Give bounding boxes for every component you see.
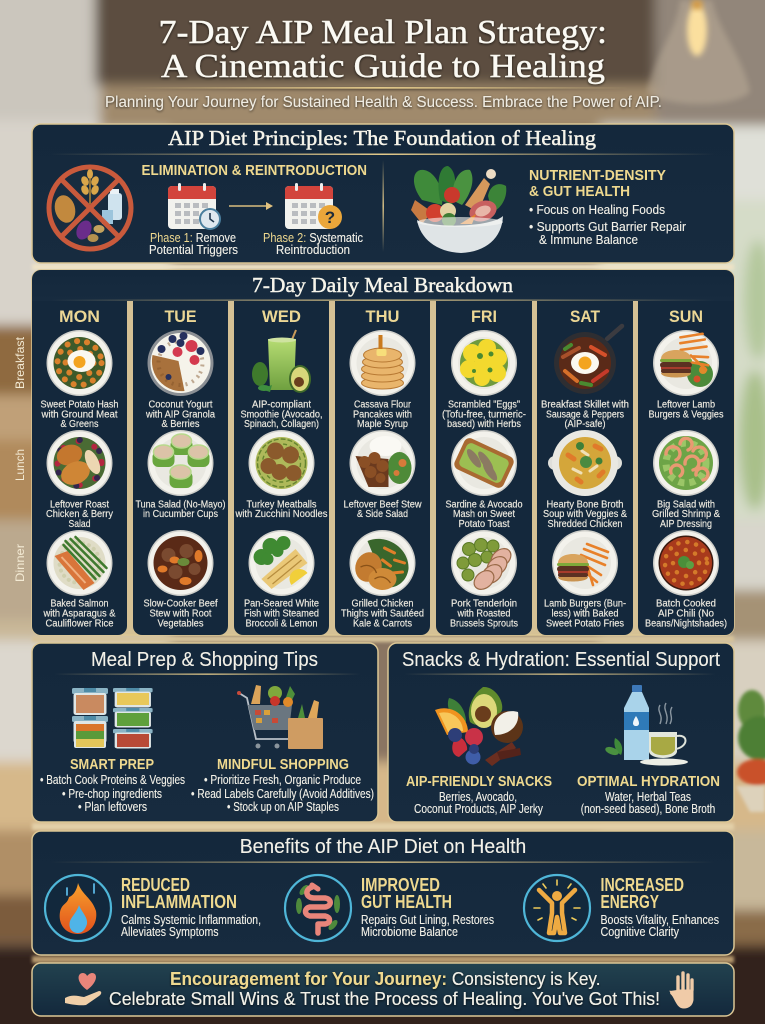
icon: nutrient bowl <box>411 166 506 253</box>
column: Tuesday: in Cucumber Cups <box>143 509 218 520</box>
dish: coconut yogurt with granola <box>148 330 214 396</box>
section: smart prep: • Batch Cook Proteins & Veggies <box>40 773 185 787</box>
column: Friday: FRI <box>471 307 497 326</box>
icon: flame in glowing ring <box>45 875 111 941</box>
column: Monday: Cauliflower Rice <box>46 618 114 630</box>
benefit: increased energy: Boosts Vitality, Enhances <box>600 912 719 927</box>
column: Tuesday: Slow-Cooker Beef <box>144 598 218 610</box>
title <box>158 14 607 85</box>
section: optimal hydration: Water, Herbal Teas <box>605 790 691 804</box>
panel: meal prep and shopping tips <box>32 643 378 822</box>
benefit: reduced inflammation <box>45 875 261 941</box>
column: Saturday: Soup with Veggies & <box>543 509 627 520</box>
column: Saturday: Sausage & Peppers <box>546 410 624 420</box>
dish: scrambled eggs <box>451 330 517 396</box>
column: Monday: with Asparagus & <box>43 608 116 620</box>
benefit: increased energy: INCREASED <box>600 875 684 895</box>
icon: calendar with question mark <box>285 183 342 229</box>
column: Friday: Potato Toast <box>458 519 510 530</box>
column: Friday: Pork Tenderloin <box>451 598 517 610</box>
text: nutrient bullets: • Supports Gut Barrier Repair <box>529 220 686 234</box>
dish: cassava flour pancakes <box>350 330 416 396</box>
column: Tuesday <box>133 301 228 635</box>
column: Monday: Baked Salmon <box>50 598 108 610</box>
text: phase 1: Phase 1: Remove <box>150 231 236 245</box>
benefit: reduced inflammation: Calms Systemic Inflammation, <box>121 912 261 927</box>
meal row labels: Lunch <box>13 449 27 481</box>
icon: meal prep containers <box>72 688 153 748</box>
dish: leftover lamb burgers and veggies <box>653 327 719 396</box>
dish: sardine avocado toast <box>451 430 517 496</box>
section: smart prep: SMART PREP <box>70 756 154 773</box>
meal row labels: Breakfast <box>13 336 27 389</box>
column: Friday: Scrambled "Eggs" <box>448 400 520 410</box>
dish: batch cooked AIP chili <box>653 530 719 596</box>
column: Monday: Leftover Roast <box>50 500 109 510</box>
text: phase 1: Potential Triggers <box>149 243 238 257</box>
heading: elimination and reintroduction: ELIMINATION & REINTRODUCTION <box>142 163 367 179</box>
title: 7-Day AIP Meal Plan Strategy: <box>158 14 607 51</box>
section: mindful shopping: • Stock up on AIP Staples <box>227 800 339 814</box>
column: Wednesday: AIP-compliant <box>252 400 311 410</box>
column: Saturday: Hearty Bone Broth <box>546 500 624 510</box>
arrow <box>229 202 273 210</box>
column: Thursday: Kale & Carrots <box>353 618 412 630</box>
benefit: improved gut health: IMPROVED <box>361 875 440 895</box>
panel: snacks and hydration <box>388 643 734 822</box>
column: Saturday: Breakfast Skillet with <box>541 400 629 410</box>
dish: pan-seared white fish <box>248 530 314 596</box>
benefit: reduced inflammation: Alleviates Symptoms <box>121 924 219 939</box>
column: Tuesday: TUE <box>164 307 196 326</box>
section: mindful shopping: MINDFUL SHOPPING <box>217 756 349 773</box>
column: Tuesday: Coconut Yogurt <box>148 400 213 410</box>
benefit: increased energy <box>524 875 719 941</box>
benefit: improved gut health: Microbiome Balance <box>361 924 458 939</box>
column: Saturday: (AIP-safe) <box>564 419 606 430</box>
column: Saturday <box>537 301 633 635</box>
text: phase 2 <box>263 231 363 257</box>
column: Friday <box>436 301 532 635</box>
dish: baked salmon <box>46 530 112 596</box>
header: title block <box>105 14 662 111</box>
section: optimal hydration <box>577 773 720 816</box>
column: Tuesday: Vegetables <box>158 618 204 630</box>
column: Friday: Sardine & Avocado <box>446 500 523 510</box>
dish: sweet potato hash <box>46 330 112 396</box>
column: Saturday: Sweet Potato Fries <box>546 618 624 630</box>
icon: shopping cart with groceries <box>237 685 323 749</box>
icon: energized person in glowing ring <box>524 875 590 941</box>
text: phase 1 <box>149 231 238 257</box>
column: Thursday: Maple Syrup <box>357 419 408 430</box>
column: Monday: Chicken & Berry <box>46 509 114 520</box>
column: Sunday: Grilled Shrimp & <box>652 509 720 520</box>
section: aip-friendly snacks <box>406 773 552 816</box>
text: encouragement: Encouragement for Your Journey: Consistency is Key. <box>170 968 600 989</box>
column: Thursday: Thighs with Sautéed <box>341 608 424 620</box>
column: Wednesday: Fish with Steamed <box>244 608 319 620</box>
icon: raised hand <box>670 973 693 1008</box>
column: Wednesday: Smoothie (Avocado, <box>240 410 322 420</box>
heading: principles: AIP Diet Principles: The Foundation of Healing <box>168 126 597 150</box>
benefit: reduced inflammation: REDUCED <box>121 875 190 895</box>
section: mindful shopping <box>191 756 374 814</box>
text: encouragement: Celebrate Small Wins & Trust the Process of Healing. You've Got This! <box>109 988 660 1009</box>
dish: breakfast skillet <box>554 326 622 394</box>
column: Sunday: Batch Cooked <box>656 598 716 610</box>
column: Thursday: Pancakes with <box>353 410 412 420</box>
benefit: reduced inflammation: INFLAMMATION <box>121 892 237 912</box>
dish: leftover beef stew and salad <box>350 430 416 496</box>
column: Sunday: Big Salad with <box>657 500 715 510</box>
column: Monday <box>32 301 127 635</box>
section: smart prep: • Pre-chop ingredients <box>62 787 162 801</box>
icon: AIP snacks <box>435 687 523 766</box>
column: Friday: based) with Herbs <box>447 419 521 430</box>
heading: meal breakdown: 7-Day Daily Meal Breakdown <box>252 273 514 297</box>
column: Thursday: THU <box>366 307 400 326</box>
text: encouragement <box>109 968 660 1009</box>
column: Thursday <box>335 301 430 635</box>
section: smart prep <box>40 756 185 814</box>
benefit: increased energy: Cognitive Clarity <box>600 924 679 939</box>
column: Friday: Brussels Sprouts <box>450 618 518 630</box>
column: Friday: Mash on Sweet <box>453 509 515 520</box>
column: Monday: & Greens <box>60 419 98 430</box>
column: Monday: with Ground Meat <box>41 410 118 420</box>
icon: heart above open hand <box>65 973 101 1005</box>
dish: turkey meatballs with zucchini noodles <box>248 430 314 496</box>
icon: water bottle and herbal tea <box>604 685 688 766</box>
heading: nutrient density <box>529 167 666 200</box>
column: Thursday: Cassava Flour <box>354 400 412 410</box>
benefit: increased energy: ENERGY <box>600 892 659 912</box>
meal row labels: Dinner <box>13 544 27 582</box>
heading: benefits: Benefits of the AIP Diet on Health <box>240 836 526 858</box>
benefit: improved gut health: GUT HEALTH <box>361 892 452 912</box>
section: mindful shopping: • Read Labels Carefully (Avoid Additives) <box>191 787 374 801</box>
dish: big salad with grilled shrimp <box>653 430 719 496</box>
heading: nutrient density: & GUT HEALTH <box>529 183 630 200</box>
panel: AIP diet principles <box>32 124 734 263</box>
column: Tuesday: & Berries <box>162 419 200 430</box>
column: Tuesday: Stew with Root <box>150 608 212 620</box>
section: optimal hydration: (non-seed based), Bone Broth <box>581 802 715 816</box>
icon: intestine in glowing ring <box>285 875 351 941</box>
column: Saturday: SAT <box>570 307 601 326</box>
text: nutrient bullets: & Immune Balance <box>539 233 638 247</box>
column: Tuesday: Tuna Salad (No-Mayo) <box>136 500 226 510</box>
column: Friday: with Roasted <box>457 608 511 620</box>
column: Sunday: AIP Chili (No <box>658 608 714 620</box>
column: Wednesday: Broccoli & Lemon <box>246 618 318 630</box>
column: Wednesday: Spinach, Collagen) <box>244 419 319 430</box>
dish: pork tenderloin with sprouts <box>451 530 517 596</box>
title: A Cinematic Guide to Healing <box>161 48 605 85</box>
text: nutrient bullets: • Focus on Healing Foods <box>529 203 665 217</box>
section: aip-friendly snacks: Coconut Products, AIP Jerky <box>414 802 544 816</box>
column: Sunday: Burgers & Veggies <box>648 410 724 420</box>
salad on right counter <box>736 690 765 812</box>
dish: bone broth soup <box>548 430 622 496</box>
benefit: improved gut health: Repairs Gut Lining, Restores <box>361 912 494 927</box>
panel: encouragement banner <box>32 963 734 1016</box>
section: aip-friendly snacks: Berries, Avocado, <box>439 790 517 804</box>
heading: meal prep: Meal Prep & Shopping Tips <box>91 649 318 671</box>
column: Sunday <box>638 301 734 635</box>
column: Friday: (Tofu-free, turmeric- <box>442 410 526 420</box>
section: smart prep: • Plan leftovers <box>78 800 147 814</box>
icon: calendar with clock <box>168 183 220 229</box>
column: Thursday: & Side Salad <box>357 509 408 520</box>
column: Thursday: Leftover Beef Stew <box>344 500 422 510</box>
icon: calendar with question mark: ? <box>325 208 335 227</box>
section: mindful shopping: • Prioritize Fresh, Organic Produce <box>204 773 361 787</box>
column: Tuesday: with AIP Granola <box>145 410 215 420</box>
icon: eliminated foods prohibition sign <box>48 166 132 250</box>
column: Sunday: SUN <box>669 307 703 326</box>
column: Saturday: less) with Baked <box>552 608 619 620</box>
column: Sunday: Leftover Lamb <box>657 400 715 410</box>
column: Saturday: Shredded Chicken <box>548 519 622 530</box>
column: Wednesday: with Zucchini Noodles <box>235 509 328 520</box>
column: Monday: Salad <box>68 519 91 530</box>
text: phase 2: Reintroduction <box>276 243 350 257</box>
heading: nutrient density: NUTRIENT-DENSITY <box>529 167 666 184</box>
text: phase 2: Phase 2: Systematic <box>263 231 363 245</box>
column: Saturday: Lamb Burgers (Bun- <box>544 598 626 610</box>
column: Monday: MON <box>59 307 100 326</box>
subtitle: Planning Your Journey for Sustained Health & Success. Embrace the Power of AIP. <box>105 94 662 111</box>
panel gap highlights <box>32 264 734 963</box>
dish: tuna salad in cucumber cups <box>148 430 214 496</box>
column: Monday: Sweet Potato Hash <box>40 400 118 410</box>
benefit: improved gut health <box>285 875 494 941</box>
column: Wednesday: Turkey Meatballs <box>246 500 316 510</box>
text: nutrient bullets <box>529 203 686 247</box>
panel: benefits of the AIP diet <box>32 831 734 955</box>
column: Thursday: Grilled Chicken <box>352 598 414 610</box>
column: Wednesday: Pan-Seared White <box>244 598 319 610</box>
dish: lamb burger with sweet potato fries <box>552 530 618 596</box>
dish: roast chicken and berry salad <box>46 430 112 496</box>
heading: snacks and hydration: Snacks & Hydration: Essential Support <box>402 649 720 671</box>
column: Wednesday: WED <box>262 307 301 326</box>
column: Sunday: AIP Dressing <box>660 519 712 530</box>
section: optimal hydration: OPTIMAL HYDRATION <box>577 773 720 790</box>
section: aip-friendly snacks: AIP-FRIENDLY SNACKS <box>406 773 552 790</box>
dish: green smoothie with avocado <box>252 330 311 393</box>
meal row labels <box>13 336 27 582</box>
column: Wednesday <box>234 301 329 635</box>
panel: 7-day daily meal breakdown <box>13 270 734 635</box>
lamp <box>647 0 750 104</box>
column: Sunday: Beans/Nightshades) <box>645 618 727 630</box>
dish: grilled chicken with kale and carrots <box>350 530 416 596</box>
dish: slow-cooker beef stew <box>148 530 214 596</box>
